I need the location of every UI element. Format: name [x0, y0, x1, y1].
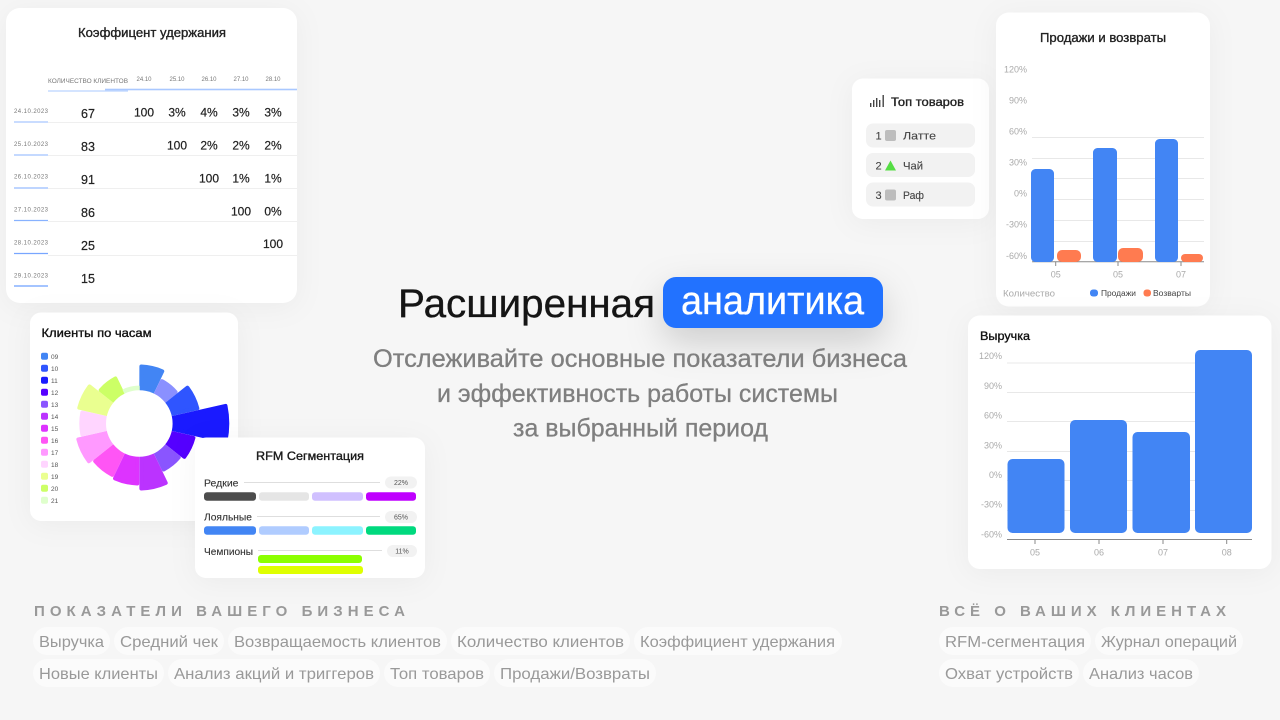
y axis labels: 0%	[989, 470, 1002, 480]
item: latte: 1	[876, 130, 882, 142]
table rows: 29.10.2023	[14, 274, 49, 280]
panel: clients by hour	[30, 312, 238, 521]
y axis labels	[1004, 64, 1027, 261]
panel: retention table	[6, 8, 297, 303]
bar chart: revenue: 06	[1094, 548, 1104, 558]
legend: hours: 15	[51, 426, 59, 433]
segment: loyal: Лояльные	[204, 512, 252, 524]
tags: business metrics: Выручка	[39, 634, 104, 651]
table rows: 86	[81, 206, 95, 220]
table rows: 100	[199, 172, 219, 186]
tags: business metrics	[33, 627, 842, 687]
table rows: 28.10.2023	[14, 240, 49, 246]
legend: hours	[41, 353, 59, 505]
y axis labels: 120%	[1004, 64, 1027, 74]
tags: business metrics: Топ товаров	[390, 666, 484, 683]
subtitle	[373, 345, 907, 442]
panel: revenue	[968, 316, 1272, 569]
title	[398, 277, 883, 328]
bar chart: sales and returns: 05	[1113, 270, 1123, 280]
tags: business metrics: Средний чек	[120, 634, 219, 651]
segment: rare: 22%	[394, 480, 408, 487]
table rows: 100	[167, 138, 187, 152]
tags: business metrics: Продажи/Возвраты	[500, 666, 650, 683]
legend: sales and returns: Количество	[1003, 288, 1055, 298]
bar chart: sales and returns	[1031, 138, 1204, 280]
y axis labels: -30%	[1006, 220, 1027, 230]
bar chart: revenue	[1007, 350, 1252, 558]
tags: client features: Анализ часов	[1089, 666, 1193, 683]
table rows: 25	[81, 239, 95, 253]
table rows: 2%	[232, 138, 250, 152]
tags: business metrics: Коэффициент удержания	[640, 634, 835, 651]
table rows: 3%	[232, 106, 250, 120]
tags: client features: Журнал операций	[1101, 634, 1237, 651]
item: tea	[866, 153, 975, 177]
item: raf: Раф	[903, 190, 924, 202]
table rows: 100	[231, 204, 251, 218]
table rows: 26.10.2023	[14, 174, 49, 180]
title: Расширенная	[398, 282, 655, 326]
table header: 27.10	[233, 77, 249, 83]
table rows: 3%	[168, 106, 186, 120]
y axis labels: 30%	[984, 440, 1002, 450]
legend: hours: 18	[51, 462, 59, 469]
table rows: 100	[263, 237, 283, 251]
table header: 28.10	[265, 77, 281, 83]
panel: RFM segmentation	[195, 438, 425, 578]
segment: champions: Чемпионы	[204, 546, 253, 558]
heading: sales and returns: Продажи и возвраты	[1040, 30, 1166, 45]
y axis labels: -30%	[981, 500, 1002, 510]
y axis labels: 30%	[1009, 158, 1027, 168]
table header	[48, 77, 297, 92]
panel: top products	[852, 78, 989, 219]
legend: hours: 11	[51, 378, 58, 385]
y axis labels: 60%	[1009, 126, 1027, 136]
legend: hours: 13	[51, 402, 59, 409]
legend: hours: 17	[51, 450, 59, 457]
table rows: 2%	[264, 138, 282, 152]
badge: analytics: аналитика	[681, 279, 865, 323]
panel: sales and returns	[996, 12, 1210, 306]
heading: about your clients: ВСЁ О ВАШИХ КЛИЕНТАХ	[939, 603, 1226, 620]
segment: rare: Редкие	[204, 478, 239, 490]
tags: client features	[939, 627, 1243, 687]
heading: RFM: RFM Сегментация	[256, 449, 364, 463]
segment: champions	[204, 545, 417, 574]
heading: retention: Коэффицент удержания	[78, 25, 226, 40]
legend: hours: 20	[51, 486, 59, 493]
y axis labels: 120%	[979, 351, 1002, 361]
table rows: 25.10.2023	[14, 142, 49, 148]
legend: sales and returns: Возварты	[1153, 289, 1191, 298]
legend: hours: 19	[51, 474, 59, 481]
heading: business metrics: ПОКАЗАТЕЛИ ВАШЕГО БИЗНЕСА	[34, 603, 405, 620]
subtitle: Отслеживайте основные показатели бизнеса	[373, 345, 907, 373]
y axis labels: 90%	[1009, 96, 1027, 106]
bar chart: sales and returns: 07	[1176, 270, 1186, 280]
segment: rare	[204, 476, 417, 501]
legend: sales and returns	[1003, 288, 1191, 298]
item: raf	[866, 182, 975, 206]
chart: radial hours	[77, 366, 227, 490]
legend: hours: 14	[51, 414, 59, 421]
subtitle: за выбранный период	[513, 414, 768, 442]
item: tea: 2	[876, 160, 882, 172]
heading: top products: Топ товаров	[891, 95, 964, 109]
table rows: 100	[134, 106, 154, 120]
legend: sales and returns: Продажи	[1101, 289, 1136, 298]
table rows: 83	[81, 140, 95, 154]
table rows: 91	[81, 173, 95, 187]
item: latte: Латте	[903, 130, 936, 142]
table header: 26.10	[201, 77, 217, 83]
legend: hours: 09	[51, 354, 59, 361]
table rows: 24.10.2023	[14, 109, 49, 115]
table rows: 1%	[264, 172, 282, 186]
tags: client features: RFM-сегментация	[945, 634, 1085, 651]
legend: hours: 12	[51, 390, 59, 397]
heading: revenue: Выручка	[980, 329, 1030, 343]
table header: КОЛИЧЕСТВО КЛИЕНТОВ	[48, 79, 128, 85]
table rows	[14, 106, 297, 286]
tags: business metrics: Количество клиентов	[457, 634, 624, 651]
tags: client features: Охват устройств	[945, 666, 1073, 683]
y axis labels: 60%	[984, 410, 1002, 420]
y axis labels: -60%	[981, 530, 1002, 540]
tags: business metrics: Новые клиенты	[39, 666, 158, 683]
bar chart: revenue: 07	[1158, 548, 1168, 558]
bar chart: revenue: 05	[1030, 548, 1040, 558]
table rows: 2%	[200, 138, 218, 152]
table rows: 27.10.2023	[14, 208, 49, 214]
legend: hours: 16	[51, 438, 59, 445]
bar chart: revenue: 08	[1222, 548, 1232, 558]
tags: business metrics: Возвращаемость клиентов	[234, 634, 441, 651]
item: raf: 3	[876, 190, 882, 202]
table rows: 15	[81, 272, 95, 286]
subtitle: и эффективность работы системы	[437, 380, 838, 408]
table rows: 67	[81, 107, 95, 121]
table rows: 0%	[264, 204, 282, 218]
y axis labels: 0%	[1014, 188, 1027, 198]
legend: hours: 21	[51, 498, 59, 505]
bar chart: sales and returns: 05	[1051, 270, 1061, 280]
table rows: 1%	[232, 172, 250, 186]
item: tea: Чай	[903, 160, 923, 172]
y axis labels: -60%	[1006, 251, 1027, 261]
segment: champions: 11%	[395, 548, 409, 556]
tags: business metrics: Анализ акций и триггеров	[174, 666, 374, 683]
table rows: 4%	[200, 106, 218, 120]
legend: hours: 10	[51, 366, 59, 373]
icon: bars	[870, 95, 884, 107]
table header: 25.10	[169, 77, 185, 83]
y axis labels: 90%	[984, 381, 1002, 391]
y axis labels	[979, 351, 1002, 540]
table header: 24.10	[136, 77, 152, 83]
item: latte	[866, 124, 975, 148]
segment: loyal: 65%	[394, 514, 408, 522]
table rows: 3%	[264, 106, 282, 120]
heading: clients by hour: Клиенты по часам	[42, 326, 152, 340]
segment: loyal	[204, 511, 417, 535]
